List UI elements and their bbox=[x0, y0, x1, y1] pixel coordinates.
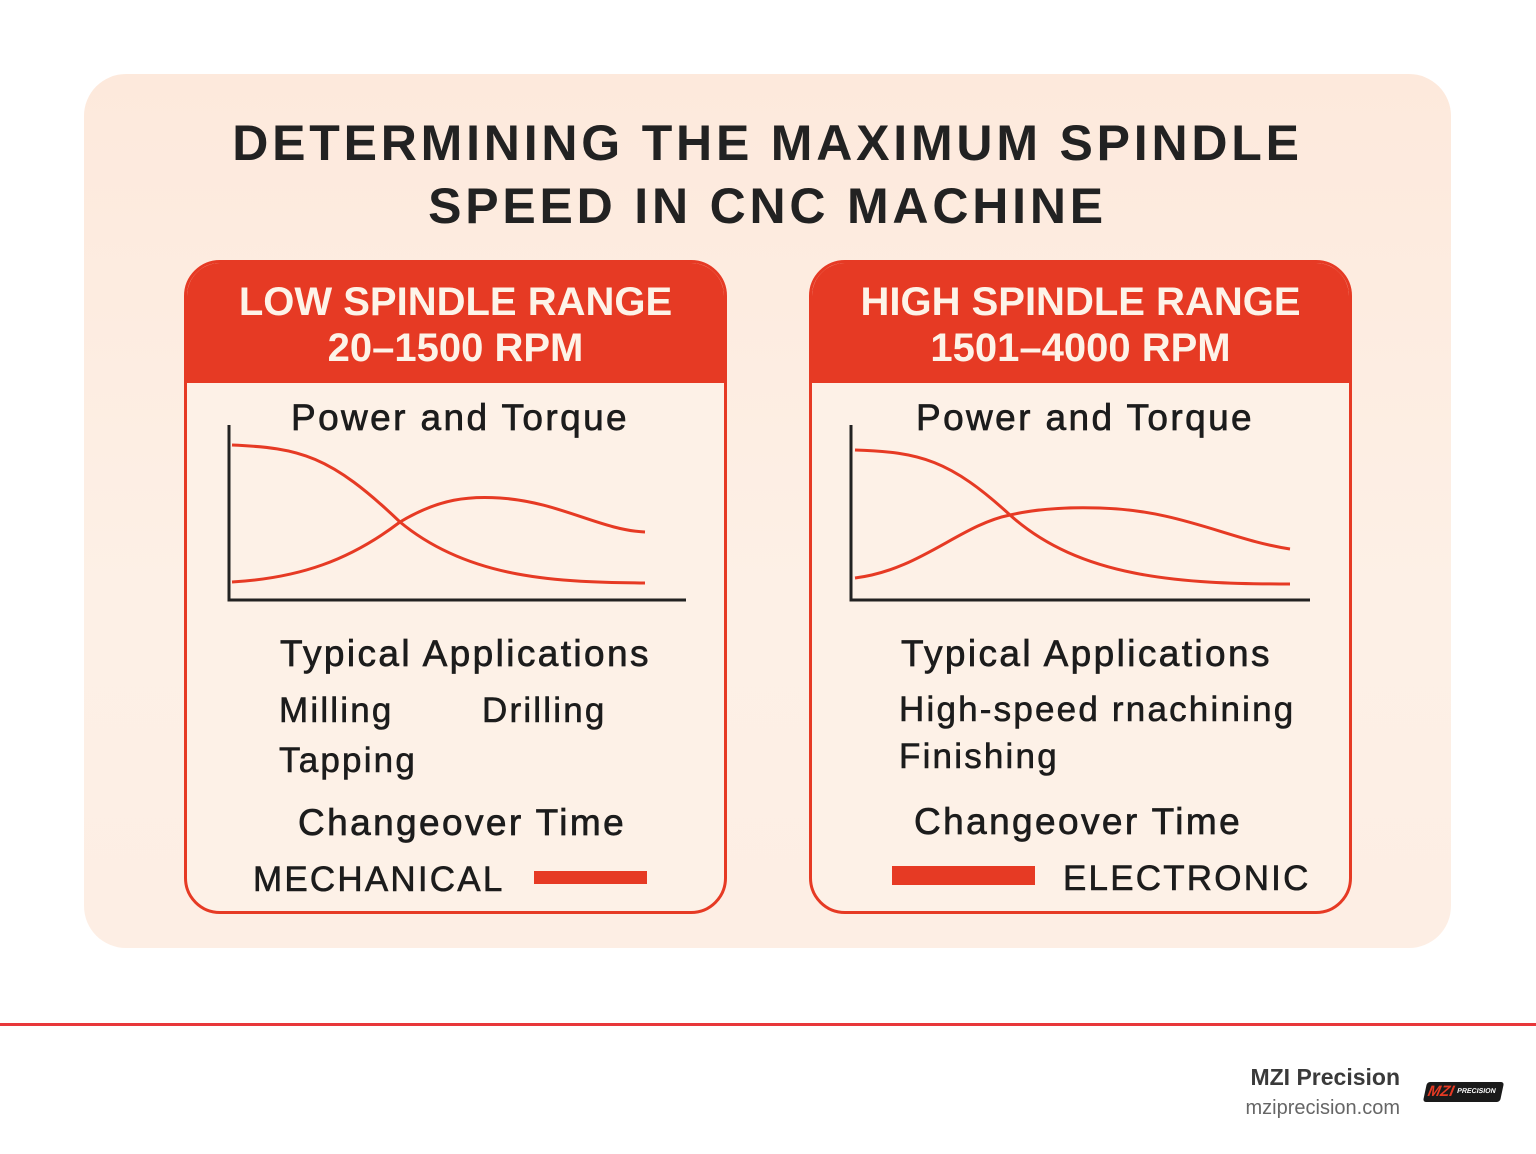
title bbox=[232, 115, 1303, 234]
footer: brand text bbox=[1246, 1064, 1400, 1119]
background panel bbox=[84, 74, 1451, 948]
heading: typical applications: Typical Applications bbox=[901, 633, 1272, 674]
icon: logo: MZI bbox=[1426, 1083, 1456, 1100]
text: mechanical: MECHANICAL bbox=[253, 860, 504, 899]
text: electronic: ELECTRONIC bbox=[1063, 859, 1311, 898]
header: high range: 1501–4000 RPM bbox=[930, 326, 1231, 370]
header: high range bbox=[812, 263, 1349, 383]
heading: typical applications: Typical Applications bbox=[280, 633, 651, 674]
icon: logo: PRECISION bbox=[1456, 1088, 1496, 1095]
footer: brand text: mziprecision.com bbox=[1246, 1097, 1400, 1119]
heading: changeover time: Changeover Time bbox=[298, 802, 626, 843]
heading: power and torque: Power and Torque bbox=[291, 397, 629, 438]
title: DETERMINING THE MAXIMUM SPINDLE bbox=[232, 115, 1303, 171]
chart: low range curves bbox=[228, 425, 686, 602]
title: SPEED IN CNC MACHINE bbox=[428, 178, 1107, 234]
text: applications list: High-speed rnachining bbox=[899, 690, 1295, 729]
panel: low spindle range: Tapping bbox=[279, 741, 417, 780]
footer divider bbox=[0, 1023, 1536, 1026]
header: low range: 20–1500 RPM bbox=[328, 326, 583, 370]
heading: changeover time: Changeover Time bbox=[914, 801, 1242, 842]
bar: electronic bbox=[892, 866, 1035, 885]
header: high range: HIGH SPINDLE RANGE bbox=[860, 280, 1301, 324]
icon: logo bbox=[1423, 1082, 1504, 1102]
footer: brand text: MZI Precision bbox=[1250, 1064, 1400, 1090]
panel: low spindle range: Drilling bbox=[482, 691, 607, 730]
header: low range bbox=[187, 263, 724, 383]
panel: low spindle range bbox=[184, 260, 727, 914]
header: low range: LOW SPINDLE RANGE bbox=[239, 280, 672, 324]
chart: high range curves bbox=[850, 425, 1310, 602]
panel: high spindle range bbox=[809, 260, 1352, 914]
panel: high spindle range: Finishing bbox=[899, 737, 1059, 776]
text: applications list: Milling bbox=[279, 691, 394, 730]
bar: mechanical bbox=[534, 871, 647, 884]
heading: power and torque: Power and Torque bbox=[916, 397, 1254, 438]
